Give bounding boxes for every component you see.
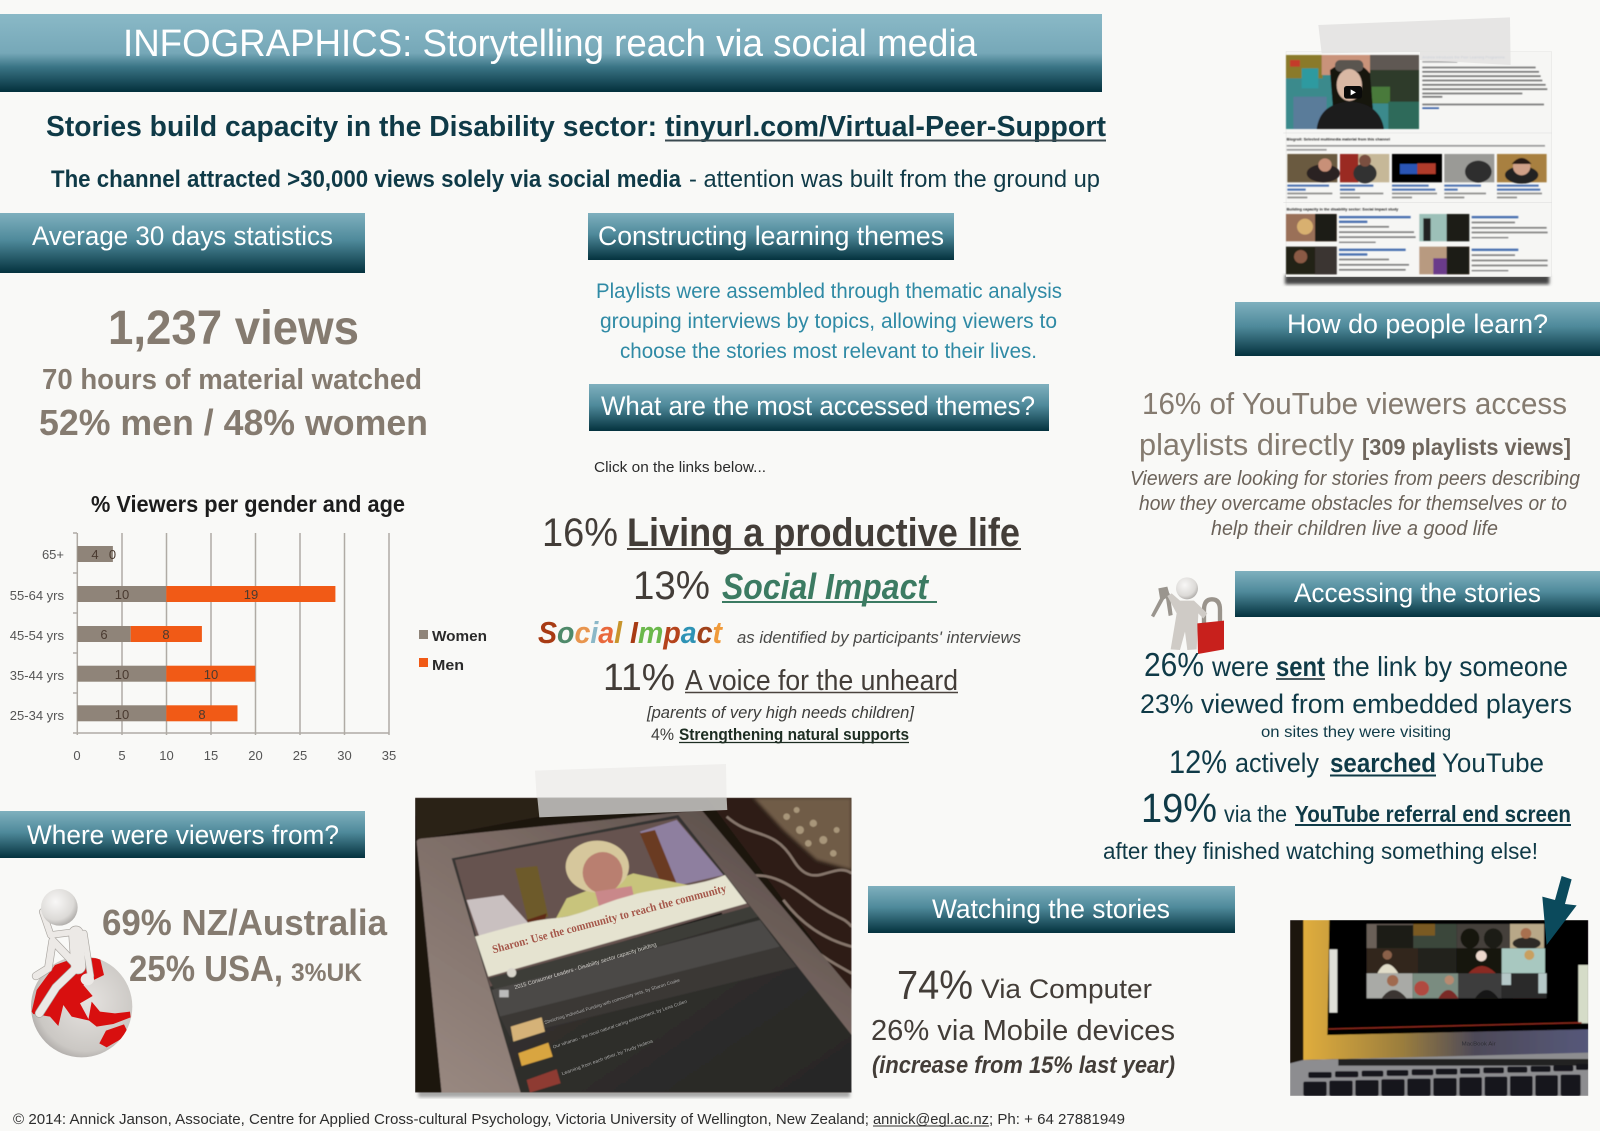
video caption: Sharon: Use the community to reach the community (491, 882, 728, 956)
panel: how people learn (1130, 386, 1580, 540)
category labels: 45-54 yrs (10, 628, 64, 643)
value axis labels (73, 748, 396, 763)
text: what viewers look for (1130, 468, 1580, 540)
stat: referral end screen: via the (1224, 801, 1287, 827)
legend (419, 628, 487, 674)
stat: referral end screen: YouTube referral end screen (1295, 801, 1571, 827)
title banner (0, 14, 1102, 92)
bar values: 0 (109, 547, 116, 562)
theme: strengthening natural supports: 4% (651, 725, 674, 744)
text: after finishing: after they finished watching something else! (1103, 838, 1538, 864)
play button (1344, 86, 1362, 99)
stat: sent the link: the link by someone (1333, 651, 1568, 682)
main video (1286, 55, 1419, 129)
title: INFOGRAPHICS: Storytelling reach via social media (123, 23, 978, 65)
stat: sent the link: were (1211, 651, 1269, 682)
bar values: 10 (204, 667, 218, 682)
footer credit: © 2014: Annick Janson, Associate, Centre for Applied Cross-cultural Psychology, Victoria University of Wellington, New Zealand; (13, 1111, 869, 1128)
panel: devices: (increase from 15% last year) (872, 1052, 1175, 1079)
panel: how people learn: 16% of YouTube viewers access (1142, 386, 1567, 421)
heading: constructing learning themes: Constructing learning themes (598, 221, 944, 251)
playlist rows: 2015 Consumer Leaders - Disability sector capacity building (514, 942, 657, 991)
text: what viewers look for: help their children live a good life (1211, 518, 1498, 540)
heading: accessing the stories: Accessing the stories (1294, 578, 1541, 608)
stat: sent the link: sent (1276, 651, 1325, 682)
footer credit: annick@egl.ac.nz (873, 1111, 989, 1128)
theme: living a productive life: Living a productive life (627, 511, 1020, 555)
subtitle with link: Stories build capacity in the Disability sector: (46, 111, 657, 143)
heading: how do people learn: How do people learn? (1287, 309, 1548, 339)
playlist rows (514, 942, 688, 1076)
heading: watching the stories (868, 886, 1235, 933)
intro statement: The channel attracted >30,000 views solely via social media (51, 166, 682, 193)
stat: searched YouTube: searched (1330, 748, 1436, 778)
section: building capacity playlists (1286, 207, 1548, 274)
category labels (10, 547, 64, 723)
panel: devices: 26% via Mobile devices (871, 1015, 1175, 1047)
playlist rows: Our whanau - the most natural caring environment, by Lena Cullen (552, 999, 688, 1050)
value axis labels: 20 (248, 748, 263, 763)
panel: how people learn: [309 playlists views] (1362, 434, 1571, 460)
panel: how people learn: playlists directly (1139, 427, 1354, 462)
icon: figure sitting on globe (31, 889, 132, 1057)
figure shadow outline (36, 912, 91, 1013)
section: building capacity playlists: Building capacity in the disability sector: Social Impact study (1287, 207, 1399, 212)
panel: 30 day statistics: 1,237 views (108, 302, 359, 355)
footer credit: ; Ph: + 64 27881949 (989, 1111, 1125, 1128)
photo: video grid on a laptop (1290, 920, 1588, 1096)
section: blogroll (1287, 137, 1547, 198)
heading: how do people learn (1235, 302, 1600, 356)
heading: constructing learning themes (588, 213, 954, 260)
screenshot: YouTube channel page (1283, 17, 1552, 284)
bar values: 8 (162, 627, 170, 642)
heading: where were viewers from: Where were viewers from? (27, 820, 339, 850)
bar chart: viewers per gender and age (10, 491, 487, 763)
text: how playlists were assembled: choose the stories most relevant to their lives. (620, 340, 1037, 363)
theme: a voice for the unheard: A voice for the unheard (685, 665, 958, 697)
stat: searched YouTube: 12% (1169, 744, 1227, 780)
legend: Women (432, 628, 487, 645)
text: what viewers look for: how they overcame obstacles for themselves or to (1139, 493, 1567, 515)
stat: referral end screen: 19% (1141, 785, 1217, 831)
value axis labels: 25 (293, 748, 307, 763)
theme: strengthening natural supports: Strengthening natural supports (679, 725, 909, 744)
stat: referral end screen (1141, 785, 1571, 831)
stat: sent the link (1144, 646, 1568, 683)
theme: social impact: Social Impact (722, 566, 930, 607)
photo: playlist on a tablet (415, 798, 852, 1097)
panel: viewer locations: 69% NZ/Australia (102, 902, 388, 943)
panel: accessed themes list (538, 511, 1021, 744)
subtitle with link (46, 111, 1106, 143)
text: how playlists were assembled: grouping interviews by topics, allowing viewers to (600, 310, 1057, 333)
note: social impact multicolour wordmark: as identified by participants' interviews (737, 628, 1021, 647)
bars (77, 546, 335, 721)
text: how playlists were assembled (596, 280, 1062, 363)
playlist rows: Learning from each other, by Trudy Hulena (561, 1038, 654, 1076)
video description: Andrew introduces the Peer Learning Programme (1422, 55, 1505, 59)
bar values: 8 (198, 707, 206, 722)
intro statement (51, 166, 1100, 193)
bar values: 19 (244, 587, 258, 602)
value axis labels: 15 (204, 748, 218, 763)
stat: searched YouTube: actively (1235, 748, 1319, 778)
stat: searched YouTube (1169, 744, 1544, 780)
chart title: % Viewers per gender and age (91, 491, 405, 517)
theme: social impact: 13% (633, 564, 710, 608)
note: parents: [parents of very high needs children] (646, 703, 915, 722)
stat: embedded players: on sites they were visiting (1261, 724, 1451, 741)
panel: viewer locations (102, 902, 388, 989)
panel: 30 day statistics: 70 hours of material watched (42, 364, 422, 396)
category labels: 25-34 yrs (10, 708, 64, 723)
heading: most accessed themes: What are the most accessed themes? (601, 391, 1035, 421)
panel: how stories are accessed (1103, 646, 1572, 864)
category labels: 35-44 yrs (10, 668, 64, 683)
stat: embedded players: 23% viewed from embedded players (1140, 689, 1572, 719)
text: how playlists were assembled: Playlists were assembled through thematic analysis (596, 280, 1062, 303)
laptop badge: MacBook Air (1462, 1041, 1496, 1047)
note: social impact multicolour wordmark (538, 615, 1021, 650)
legend: Men (432, 657, 464, 674)
theme: a voice for the unheard (603, 657, 958, 699)
intro statement: - attention was built from the ground up (689, 166, 1100, 193)
stat: searched YouTube: YouTube (1442, 748, 1544, 778)
value axis labels: 5 (118, 748, 126, 763)
heading: watching the stories: Watching the stories (932, 894, 1170, 924)
decoration: tape on tablet photo (535, 764, 727, 817)
section: blogroll: Blogroll: Selected multimedia material from this channel (1287, 137, 1390, 142)
bar values (91, 547, 258, 722)
video description (1422, 55, 1547, 109)
value axis labels: 10 (159, 748, 174, 763)
bar values: 10 (115, 707, 129, 722)
heading: where were viewers from (0, 811, 365, 858)
value axis labels: 0 (73, 748, 81, 763)
category labels: 55-64 yrs (10, 588, 64, 603)
panel: 30 day statistics: 52% men / 48% women (39, 402, 428, 443)
value axis labels: 35 (382, 748, 396, 763)
decoration: tape on screenshot (1318, 17, 1511, 65)
subtitle with link: tinyurl.com/Virtual-Peer-Support (665, 111, 1106, 143)
category labels: 65+ (42, 547, 64, 562)
bar values: 10 (115, 667, 129, 682)
heading: accessing the stories (1235, 571, 1600, 617)
playlist rows: Stretching Individual Funding with community nets, by Sharon Cooke (544, 977, 681, 1025)
bar values: 6 (100, 627, 108, 642)
theme: a voice for the unheard: 11% (603, 657, 675, 699)
arrow: pointing to laptop (1542, 876, 1577, 945)
stat: sent the link: 26% (1144, 646, 1204, 683)
note: click on links: Click on the links below... (594, 459, 766, 476)
panel: 30 day statistics (39, 302, 428, 443)
panel: devices: Via Computer (981, 974, 1152, 1004)
bar values: 4 (91, 547, 99, 562)
theme: living a productive life: 16% (542, 511, 618, 555)
heading: most accessed themes (589, 384, 1049, 431)
value axis labels: 30 (337, 748, 352, 763)
panel: devices: 74% (897, 962, 973, 1008)
heading: average 30 days statistics: Average 30 days statistics (32, 221, 333, 251)
heading: average 30 days statistics (0, 213, 365, 273)
panel: viewer locations: 3%UK (291, 959, 362, 987)
bar values: 10 (115, 587, 129, 602)
icon: figure with keys and padlock (1151, 577, 1224, 654)
text: what viewers look for: Viewers are looking for stories from peers describing (1130, 468, 1580, 490)
panel: devices (871, 962, 1175, 1079)
stat: embedded players (1140, 689, 1572, 741)
note: social impact multicolour wordmark: Social Impact (538, 615, 724, 650)
panel: viewer locations: 25% USA, (129, 948, 283, 989)
theme: social impact (633, 564, 937, 608)
